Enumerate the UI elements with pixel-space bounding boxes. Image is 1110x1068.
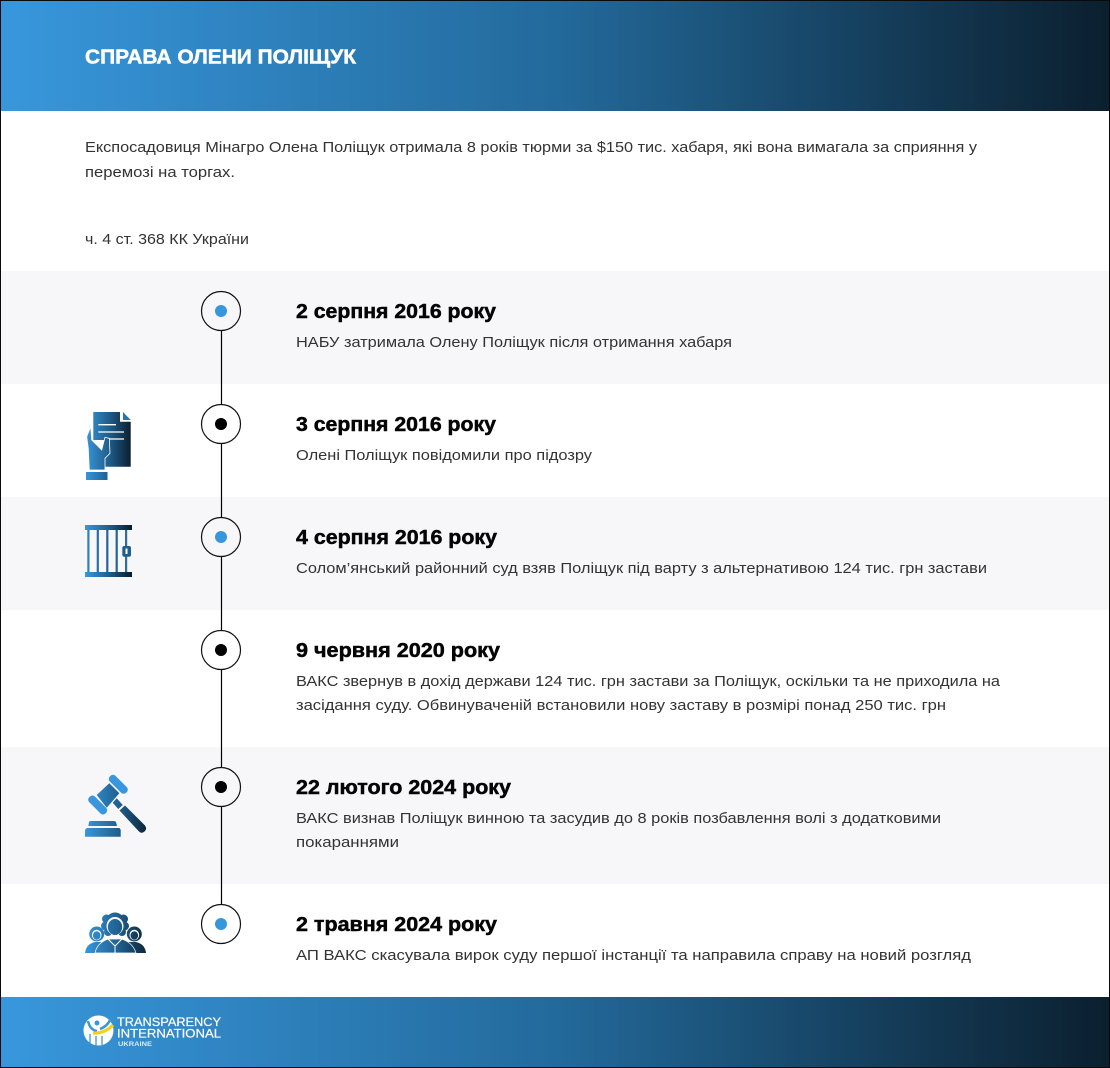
timeline entry: 22 February 2024 — [202, 768, 941, 851]
footer band — [1, 997, 1109, 1067]
timeline entry: 2 May 2024: 2 травня 2024 року — [296, 914, 498, 936]
logo: Transparency International Ukraine: INTERNATIONAL — [117, 1026, 221, 1040]
timeline entry: 22 February 2024: ВАКС визнав Поліщук винною та засудив до 8 років позбавлення волі з додатковими — [296, 810, 941, 827]
legal article reference: ч. 4 ст. 368 КК України — [85, 231, 249, 248]
logo: Transparency International Ukraine: TRANSPARENCY — [117, 1015, 221, 1029]
logo: Transparency International Ukraine: UKRAINE — [118, 1041, 153, 1048]
timeline entry: 9 June 2020: 9 червня 2020 року — [296, 640, 501, 662]
timeline entry: 9 June 2020 — [202, 630, 1001, 714]
timeline entry: 22 February 2024: покараннями — [296, 834, 399, 851]
row backgrounds — [1, 271, 1109, 884]
icon: hand holding document — [86, 412, 131, 480]
timeline entry: 2 August 2016: НАБУ затримала Олену Поліщук після отримання хабаря — [296, 334, 732, 351]
timeline entry: 4 August 2016: 4 серпня 2016 року — [296, 527, 498, 549]
timeline entry: 9 June 2020: ВАКС звернув в дохід держави 124 тис. грн застави за Поліщук, оскільки та не приходила на — [296, 673, 1001, 690]
icon: panel of judges — [85, 912, 146, 953]
timeline entry: 2 May 2024: АП ВАКС скасувала вирок суду першої інстанції та направила справу на новий розгляд — [296, 947, 971, 964]
timeline entry: 4 August 2016: Солом’янський районний суд взяв Поліщук під варту з альтернативою 124 тис. грн застави — [296, 560, 987, 577]
timeline entry: 2 May 2024 — [202, 904, 971, 964]
timeline entry: 3 August 2016: 3 серпня 2016 року — [296, 414, 497, 436]
logo: Transparency International Ukraine — [84, 1015, 221, 1048]
timeline entry: 22 February 2024: 22 лютого 2024 року — [296, 777, 512, 799]
timeline entry: 2 August 2016 — [202, 292, 732, 351]
timeline entry: 3 August 2016 — [202, 404, 593, 464]
intro text: перемозі на торгах. — [85, 164, 235, 181]
timeline entry: 4 August 2016 — [202, 518, 987, 577]
timeline entry: 2 August 2016: 2 серпня 2016 року — [296, 301, 497, 323]
intro text — [85, 139, 978, 181]
title: СПРАВА ОЛЕНИ ПОЛІЩУК — [85, 46, 356, 68]
header band — [1, 1, 1109, 111]
timeline entry: 3 August 2016: Олені Поліщук повідомили про підозру — [296, 447, 593, 464]
intro text: Експосадовиця Мінагро Олена Поліщук отримала 8 років тюрми за $150 тис. хабаря, які вона вимагала за сприяння у — [85, 139, 978, 156]
timeline entry: 9 June 2020: засідання суду. Обвинуваченій встановили нову заставу в розмірі понад 250 тис. грн — [296, 697, 946, 714]
icon: prison bars — [85, 525, 132, 577]
timeline axis — [220, 311, 222, 924]
icon: judge gavel — [85, 773, 146, 837]
